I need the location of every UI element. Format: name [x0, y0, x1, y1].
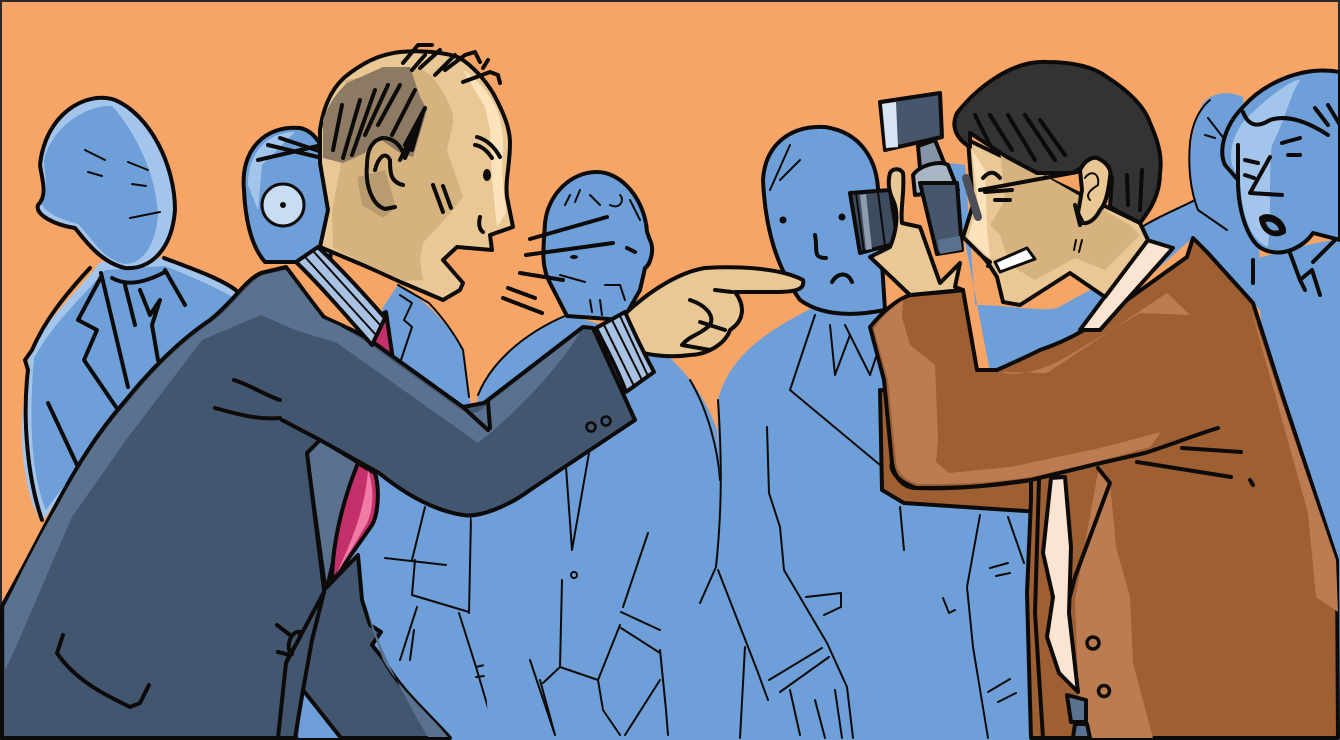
dark suit body and arm	[2, 267, 635, 738]
striped cuff	[596, 312, 654, 392]
figure: bald man in suit	[2, 45, 803, 738]
shout lines	[503, 217, 613, 313]
figure: blue man in centre	[470, 172, 750, 740]
hair strands	[975, 115, 1142, 210]
jacket buttons	[1087, 637, 1099, 649]
jacket highlights	[874, 300, 1161, 484]
face and neck	[963, 140, 1148, 305]
figure: far-left bystander	[22, 98, 240, 522]
head highlight	[463, 70, 506, 227]
brown jacket	[870, 238, 1338, 738]
hair strands	[333, 85, 425, 160]
camera connector	[918, 140, 945, 168]
cheek lines	[1074, 240, 1082, 252]
face shadow	[990, 150, 1140, 280]
camera	[850, 93, 962, 254]
jacket back layer	[880, 390, 1040, 512]
brow and eye	[983, 173, 1012, 200]
glasses	[980, 172, 1077, 190]
eye and brow	[475, 137, 500, 158]
jacket details	[892, 428, 1253, 738]
face highlight	[968, 150, 990, 258]
suit highlights	[5, 270, 580, 670]
face shadow	[332, 68, 463, 281]
ear	[367, 138, 405, 209]
ear	[1078, 158, 1110, 223]
figure: photographer in brown jacket	[850, 62, 1338, 738]
blue gap between suit legs	[298, 690, 341, 738]
grey shirt-front sliver	[307, 440, 358, 590]
ear shadow	[357, 170, 396, 218]
figure: bystander with round glasses	[244, 128, 335, 262]
top hair wisps	[403, 45, 500, 83]
striped collar	[296, 247, 385, 345]
hair patch	[323, 67, 427, 163]
figure: blue man behind bald man's arm	[290, 285, 520, 740]
figure: blue men at right	[950, 71, 1340, 740]
pointing hand	[624, 267, 803, 356]
red tie lower	[332, 463, 378, 582]
camera hand	[870, 169, 963, 295]
teeth	[995, 248, 1035, 272]
pink collar	[1080, 240, 1173, 330]
suit details	[57, 380, 490, 738]
camera top	[913, 163, 958, 195]
red tie upper	[372, 312, 393, 360]
pink shirt	[1043, 477, 1078, 692]
head	[320, 51, 513, 300]
figure: blue man being pointed at	[700, 127, 1035, 740]
lens	[850, 190, 898, 253]
hair	[954, 62, 1161, 223]
grey tie bit	[1067, 695, 1090, 738]
flash	[880, 93, 942, 150]
camera body	[920, 183, 962, 254]
